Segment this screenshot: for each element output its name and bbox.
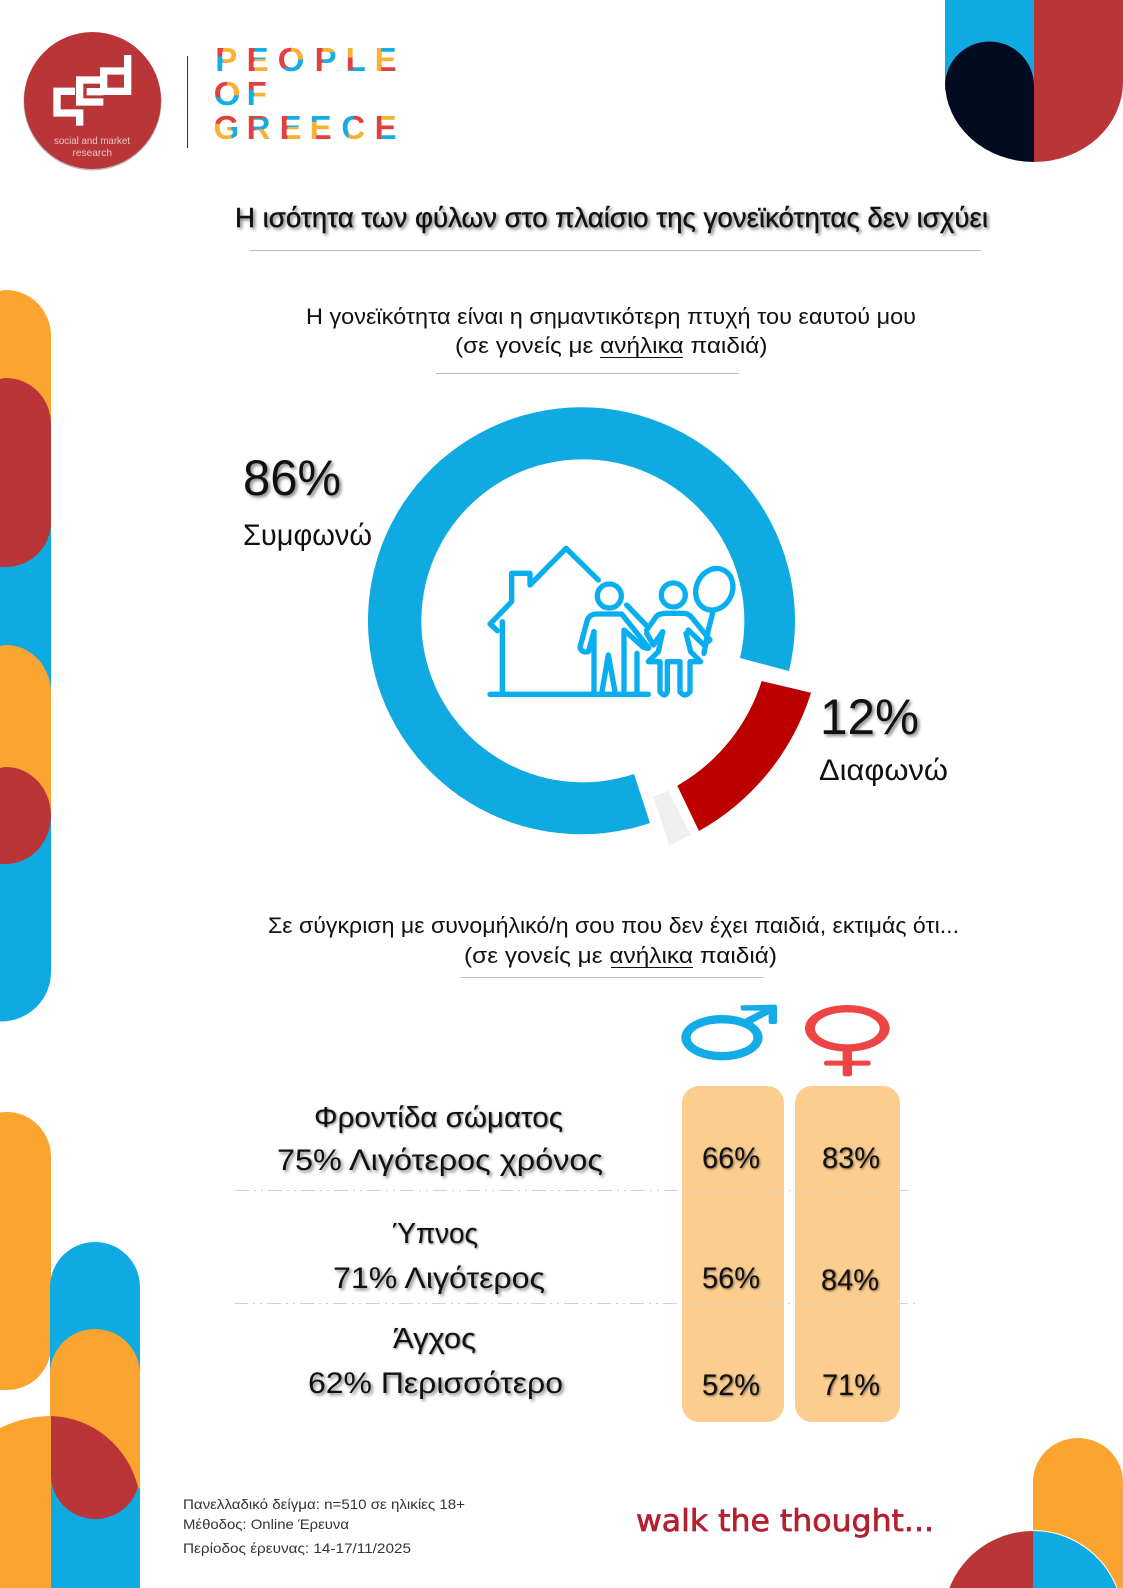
donut segment: no answer [653, 791, 691, 845]
decoration: left column shapes [0, 290, 51, 1022]
donut chart [368, 407, 811, 845]
row: body care [277, 1102, 880, 1177]
logo: People of Greece: O [214, 75, 241, 112]
decoration: top right shapes [945, 0, 1123, 162]
logo: People of Greece: E [280, 109, 302, 146]
footer: survey details [183, 1496, 465, 1556]
logo: social and market research badge [24, 32, 162, 170]
label: agree 86%: 86% [243, 450, 341, 506]
logo: People of Greece [214, 41, 397, 146]
footer: survey details: Μέθοδος: Online Έρευνα [183, 1516, 349, 1532]
question 2 heading: (σε γονείς με ανήλικα παιδιά) [464, 943, 777, 968]
label: agree 86%: Συμφωνώ [243, 519, 372, 552]
row: sleep: Ύπνος [392, 1218, 478, 1250]
title: Η ισότητα των φύλων στο πλαίσιο της γονεϊκότητας δεν ισχύει [235, 202, 988, 233]
icon: female symbol [805, 1005, 890, 1076]
row: stress: Άγχος [393, 1323, 476, 1355]
logo: People of Greece: O [278, 41, 305, 78]
question 1 heading: (σε γονείς με ανήλικα παιδιά) [455, 333, 768, 358]
row: body care: 66% [702, 1142, 760, 1175]
decoration: bottom right shapes [949, 1438, 1123, 1588]
question 1 heading: Η γονεϊκότητα είναι η σημαντικότερη πτυχή του εαυτού μου [306, 304, 916, 329]
column: women [795, 1086, 900, 1422]
tagline: walk the thought... [636, 1504, 934, 1539]
label: agree 86% [243, 450, 372, 552]
logo: People of Greece: P [315, 41, 337, 78]
donut segment: agree 86% [368, 407, 795, 834]
logo: People of Greece: E [375, 41, 397, 78]
logo: People of Greece: E [310, 109, 332, 146]
logo: People of Greece: F [247, 75, 267, 112]
row: sleep [333, 1218, 879, 1297]
logo: People of Greece: P [215, 41, 237, 78]
logo: People of Greece: R [247, 109, 271, 146]
question 2 heading: Σε σύγκριση με συνομήλικό/η σου που δεν έχει παιδιά, εκτιμάς ότι... [268, 913, 959, 938]
logo: People of Greece: E [247, 41, 269, 78]
row: body care: 83% [822, 1142, 880, 1175]
row: body care: 75% Λιγότερος χρόνος [277, 1144, 603, 1177]
row: stress: 52% [702, 1369, 760, 1402]
logo: People of Greece: C [341, 109, 365, 146]
row: stress [308, 1323, 880, 1402]
label: disagree 12%: 12% [820, 689, 919, 745]
label: disagree 12%: Διαφωνώ [819, 754, 948, 787]
footer: survey details: Πανελλαδικό δείγμα: n=510 σε ηλικίες 18+ [183, 1496, 465, 1512]
logo: People of Greece: E [375, 109, 397, 146]
row: stress: 71% [822, 1369, 880, 1402]
row: stress: 62% Περισσότερο [308, 1367, 563, 1400]
footer: survey details: Περίοδος έρευνας: 14-17/11/2025 [183, 1540, 411, 1556]
icon: male symbol [681, 1005, 777, 1060]
logo: People of Greece: G [214, 109, 239, 146]
logo: People of Greece: L [346, 41, 366, 78]
donut segment: disagree 12% [677, 681, 811, 831]
row: sleep: 56% [702, 1262, 760, 1295]
logo: social and market research badge: research [72, 147, 112, 159]
icon: house with parent and child holding balloon [490, 548, 740, 695]
label: disagree 12% [819, 689, 948, 787]
question 2 heading [268, 913, 959, 968]
row: sleep: 84% [821, 1264, 879, 1297]
question 1 heading [306, 304, 916, 358]
row: body care: Φροντίδα σώματος [314, 1102, 563, 1134]
column: men [682, 1086, 784, 1422]
logo: social and market research badge: social and market [54, 135, 130, 147]
decoration: bottom left shapes [0, 1112, 140, 1588]
row: sleep: 71% Λιγότερος [333, 1262, 545, 1295]
